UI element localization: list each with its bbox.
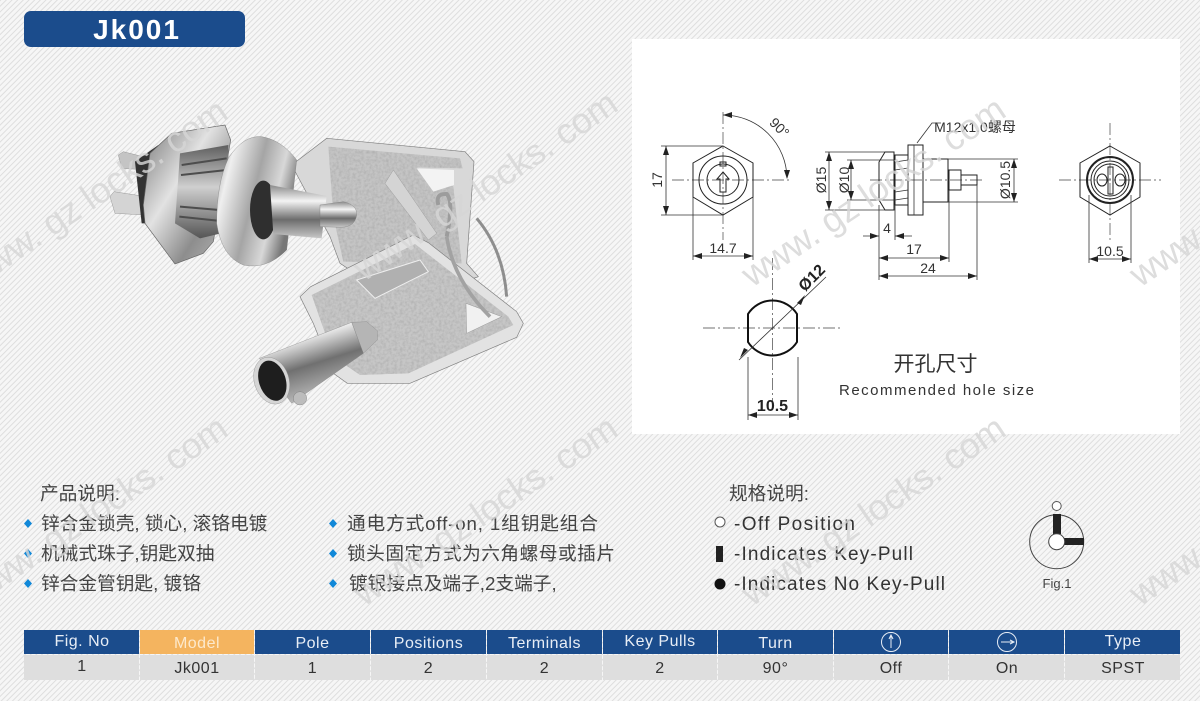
- lock terminals: [110, 145, 158, 223]
- table data row: 2: [655, 660, 665, 677]
- switch position diagram Fig.1: [1030, 502, 1084, 591]
- side view drawing: Ø10: [836, 167, 852, 193]
- switch position diagram Fig.1: Fig.1: [1043, 576, 1071, 591]
- product description: right column: [329, 513, 615, 594]
- product description: left column: 锌合金管钥匙, 镀铬: [41, 573, 201, 594]
- table header row: Model: [174, 635, 220, 652]
- table data row: 2: [540, 660, 549, 677]
- table data row: [24, 655, 1180, 680]
- product description: left column: [24, 483, 268, 594]
- lock thread: [175, 145, 228, 238]
- front view drawing: 14.7: [709, 240, 737, 256]
- table data row: 1: [77, 658, 87, 675]
- product photo: lock and keys: [110, 125, 523, 409]
- specification legend: -Off Position: [734, 514, 855, 535]
- front view drawing: 17: [649, 172, 665, 188]
- side view drawing: Ø15: [813, 167, 829, 193]
- product description: right column: 通电方式off-on, 1组钥匙组合: [347, 513, 598, 534]
- product description: right column: 锁头固定方式为六角螺母或插片: [347, 543, 615, 564]
- watermarks: [0, 80, 1200, 614]
- side view drawing: M12x1.0螺母: [934, 119, 1016, 135]
- table data row: 90°: [763, 660, 788, 677]
- side view drawing: 24: [920, 260, 936, 276]
- watermarks: www. gz locks. com: [733, 405, 1015, 614]
- front view drawing: [649, 112, 793, 260]
- table data row: 1: [308, 660, 317, 677]
- watermarks: www. gz locks. com: [345, 405, 627, 614]
- recommended hole drawing: [703, 258, 843, 420]
- table data row: SPST: [1101, 660, 1145, 677]
- specification legend: 规格说明:: [729, 483, 809, 504]
- table header row: Turn: [758, 635, 793, 652]
- table header row: [24, 630, 1180, 654]
- table header row: Key Pulls: [624, 633, 696, 650]
- lock cap: [217, 137, 297, 266]
- specification legend: -Indicates No Key-Pull: [734, 574, 945, 595]
- product description: left column: 机械式珠子,钥匙双抽: [41, 543, 214, 564]
- title badge: Jk001: [93, 14, 181, 45]
- icon: on arrow: [998, 632, 1016, 652]
- product description: right column: 镀银接点及端子,2支端子,: [349, 573, 557, 594]
- watermarks: www. gz locks. com: [733, 86, 1015, 295]
- recommended hole drawing: Ø12: [796, 262, 829, 295]
- table header row: Terminals: [508, 635, 581, 652]
- watermarks: www. gz locks. com: [345, 80, 627, 289]
- side view drawing: [813, 119, 1018, 280]
- lock nut: [143, 125, 231, 264]
- product description: left column: 产品说明:: [40, 483, 120, 504]
- front key head: [300, 235, 523, 383]
- side view drawing: Ø10.5: [997, 161, 1013, 199]
- table data row: Jk001: [174, 660, 220, 677]
- rear view drawing: 10.5: [1096, 243, 1124, 259]
- front key tube: [248, 322, 377, 409]
- lock barrel: [250, 181, 357, 239]
- specification table: [24, 630, 1180, 680]
- key ring: [438, 194, 507, 297]
- technical drawing panel: [632, 39, 1180, 434]
- front view drawing: 90°: [766, 114, 793, 141]
- product description: left column: 锌合金锁壳, 锁心, 滚铬电镀: [41, 513, 268, 534]
- hole size caption: 开孔尺寸: [894, 353, 978, 376]
- table data row: 2: [424, 660, 433, 677]
- table data row: On: [996, 660, 1018, 677]
- icon: off arrow: [882, 632, 900, 652]
- recommended hole drawing: 10.5: [757, 398, 788, 415]
- side view drawing: 4: [883, 220, 891, 236]
- lock rear key blade: [292, 138, 478, 303]
- side view drawing: 17: [906, 241, 922, 257]
- specification legend: -Indicates Key-Pull: [734, 544, 913, 565]
- table header row: Type: [1105, 633, 1141, 650]
- rear view drawing: [1059, 123, 1161, 263]
- table header row: Pole: [295, 635, 330, 652]
- title badge: [24, 11, 245, 47]
- table header row: Positions: [394, 635, 463, 652]
- specification legend: [714, 483, 945, 595]
- table header row: Fig. No: [54, 633, 110, 650]
- hole size caption: [839, 353, 1034, 399]
- hole size caption: Recommended hole size: [839, 382, 1034, 399]
- table data row: Off: [880, 660, 902, 677]
